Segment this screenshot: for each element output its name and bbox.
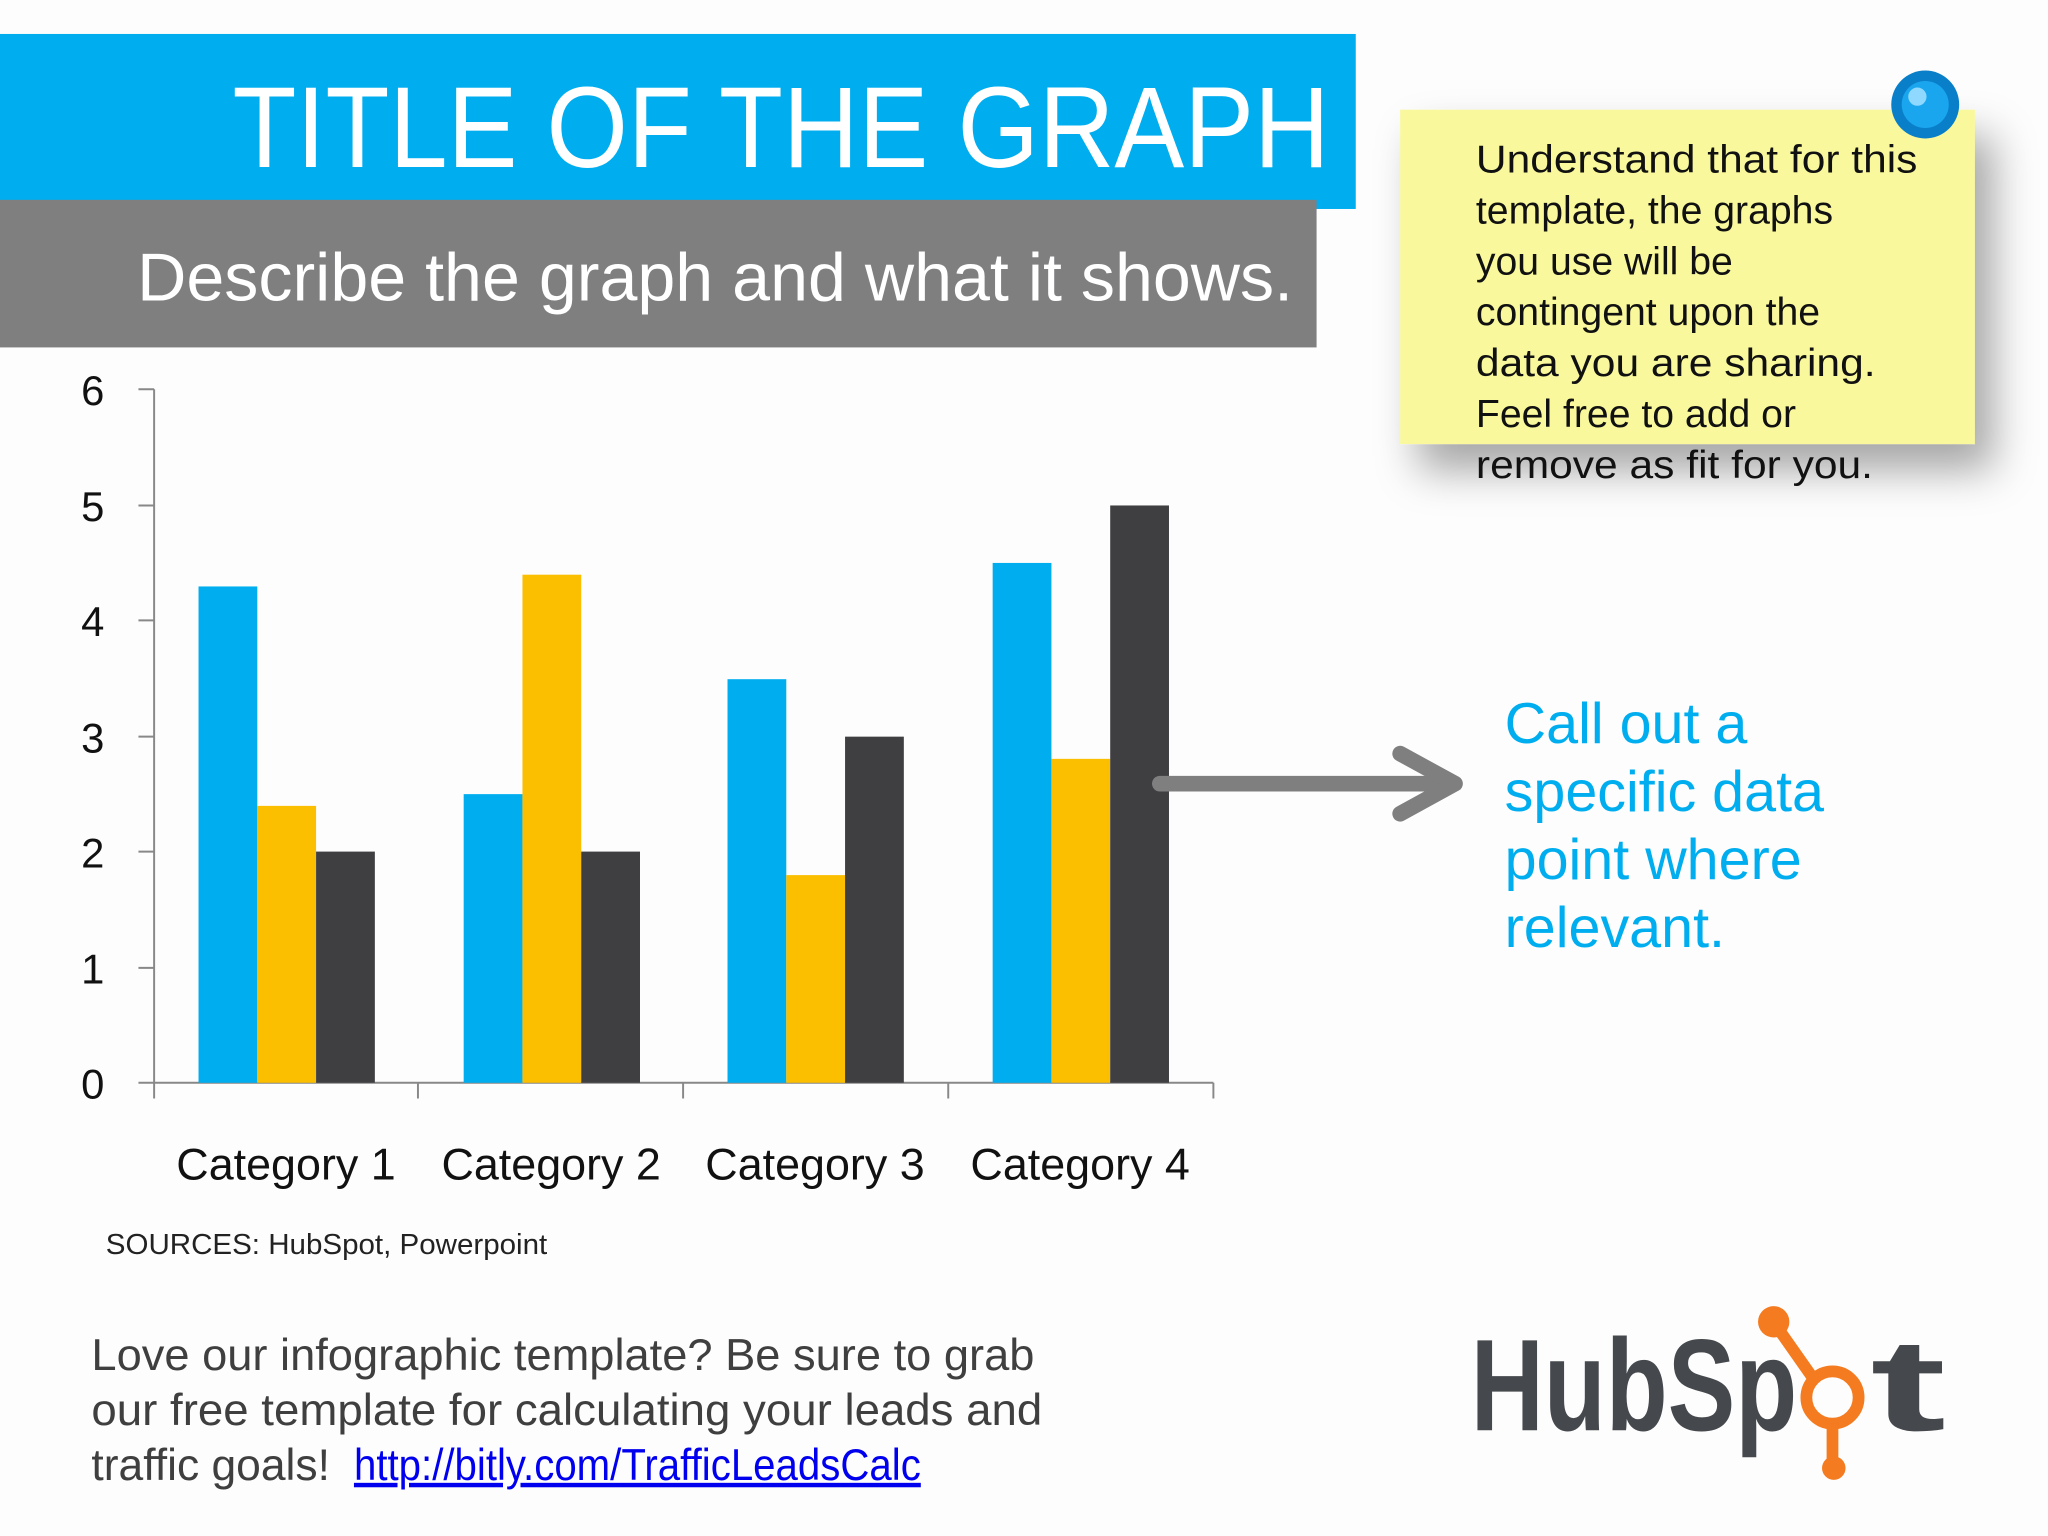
bar chart: 4 <box>81 598 104 645</box>
sticky note: remove as fit for you. <box>1476 444 1873 487</box>
sources: SOURCES: HubSpot, Powerpoint <box>106 1229 547 1261</box>
bar chart: 2 <box>81 829 104 876</box>
subtitle <box>0 200 1317 347</box>
subtitle: Describe the graph and what it shows. <box>137 240 1293 315</box>
bar chart: 0 <box>81 1060 104 1107</box>
sticky note <box>1400 71 1975 487</box>
arrow <box>1160 754 1455 814</box>
sticky note: Feel free to add or <box>1476 393 1796 436</box>
sticky note: template, the graphs <box>1476 189 1833 232</box>
logo: HubSpot: HubSp <box>1471 1312 1797 1458</box>
sticky note: contingent upon the <box>1476 291 1820 334</box>
bar chart: 5 <box>81 483 104 530</box>
callout: relevant. <box>1505 896 1725 960</box>
bar chart <box>81 367 1213 1189</box>
bar chart: 3 <box>81 714 104 761</box>
callout: point where <box>1505 828 1802 892</box>
callout: specific data <box>1505 760 1824 824</box>
sticky note: data you are sharing. <box>1476 342 1876 385</box>
icon: pin <box>1891 71 1959 138</box>
footer text: Love our infographic template? Be sure to grab <box>91 1331 1034 1380</box>
bar chart: Category 2 <box>441 1140 661 1189</box>
bar chart: Category 1 <box>176 1140 396 1189</box>
footer text: http://bitly.com/TrafficLeadsCalc <box>354 1441 921 1490</box>
sticky note: you use will be <box>1476 240 1733 283</box>
title <box>0 34 1356 209</box>
bar chart: 1 <box>81 946 104 993</box>
logo: HubSpot: t <box>1870 1312 1946 1458</box>
title: TITLE OF THE GRAPH <box>232 64 1330 192</box>
footer text: traffic goals! <box>91 1441 342 1490</box>
sticky note: Understand that for this <box>1476 138 1917 181</box>
bar chart: Category 3 <box>705 1140 925 1189</box>
footer text: our free template for calculating your leads and <box>91 1386 1042 1435</box>
bar chart: Category 4 <box>970 1140 1190 1189</box>
callout: Call out a <box>1505 692 1747 756</box>
bar chart: 6 <box>81 367 104 414</box>
